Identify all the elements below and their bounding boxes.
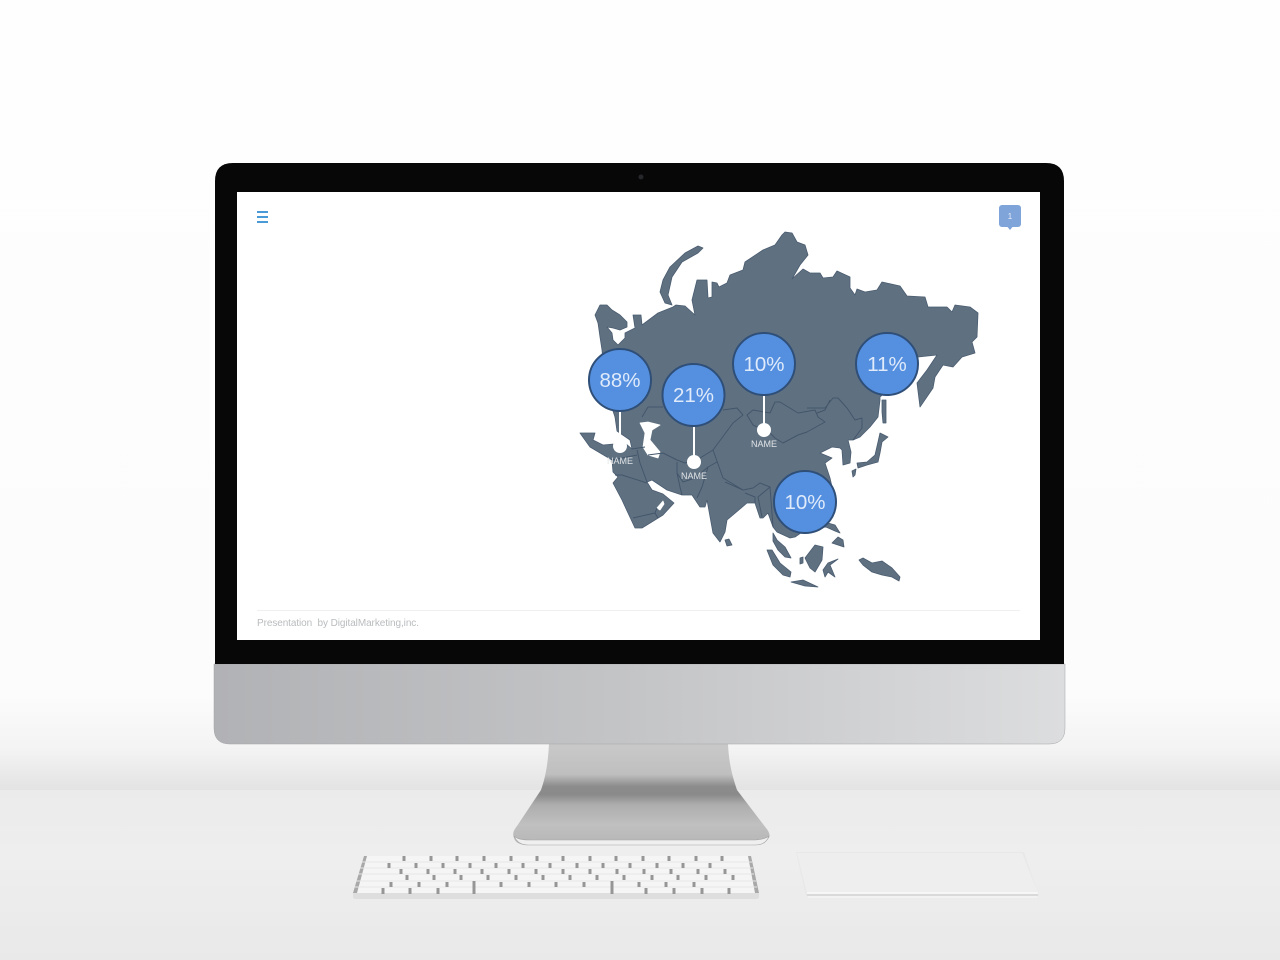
island: Borneo	[805, 545, 823, 572]
icon: notification badge	[999, 205, 1021, 230]
monitor chin	[214, 664, 1065, 744]
island: Kyushu	[852, 469, 856, 477]
monitor stand	[513, 744, 770, 845]
country borders	[612, 398, 862, 527]
island: Sulawesi	[823, 559, 838, 577]
pin: 21%	[681, 425, 707, 481]
webcam	[638, 174, 644, 180]
island: Novaya Zemlya	[660, 246, 703, 305]
island: Sri Lanka	[725, 539, 732, 546]
label: NAME 1: NAME	[607, 456, 633, 466]
island: Japan Honshu and Hokkaido	[857, 433, 888, 468]
background: desk	[0, 790, 1280, 960]
monitor bezel	[215, 163, 1064, 664]
bubble: 21%: 21%	[673, 384, 714, 407]
label: NAME 3: NAME	[751, 439, 777, 449]
island: small Karimata	[800, 557, 803, 564]
footer text: Presentation by DigitalMarketing,inc.	[257, 618, 419, 629]
bubble: 10% north	[733, 333, 795, 395]
bubble: 10% south: 10%	[784, 491, 826, 514]
bubble: 10% north: 10%	[743, 353, 785, 376]
icon: hamburger menu	[257, 211, 268, 223]
icon: notification badge: 1	[1008, 212, 1013, 221]
bubble: 88%	[589, 349, 651, 411]
mainland Eurasia	[580, 232, 978, 542]
Caspian Sea	[640, 422, 660, 458]
bubble: 88%: 88%	[599, 369, 641, 392]
bubble: 11%	[856, 333, 918, 395]
island: Sumatra	[767, 550, 791, 577]
island: Java	[791, 580, 818, 587]
keyboard	[353, 856, 759, 899]
bubble: 11%: 11%	[867, 353, 907, 376]
island: New Guinea	[859, 558, 900, 581]
pin: 10% north	[751, 395, 777, 449]
trackpad	[796, 852, 1039, 898]
screen	[237, 192, 1040, 640]
bubble: 21%	[662, 364, 724, 426]
map of Asia	[580, 232, 978, 587]
island: Philippines	[832, 537, 844, 547]
label: NAME 2: NAME	[681, 471, 707, 481]
pin: 88%	[607, 410, 633, 466]
bubble: 10% south	[774, 471, 836, 533]
Persian Gulf inlet	[657, 501, 664, 510]
island: Sakhalin	[882, 400, 886, 423]
Malay peninsula	[773, 533, 791, 558]
